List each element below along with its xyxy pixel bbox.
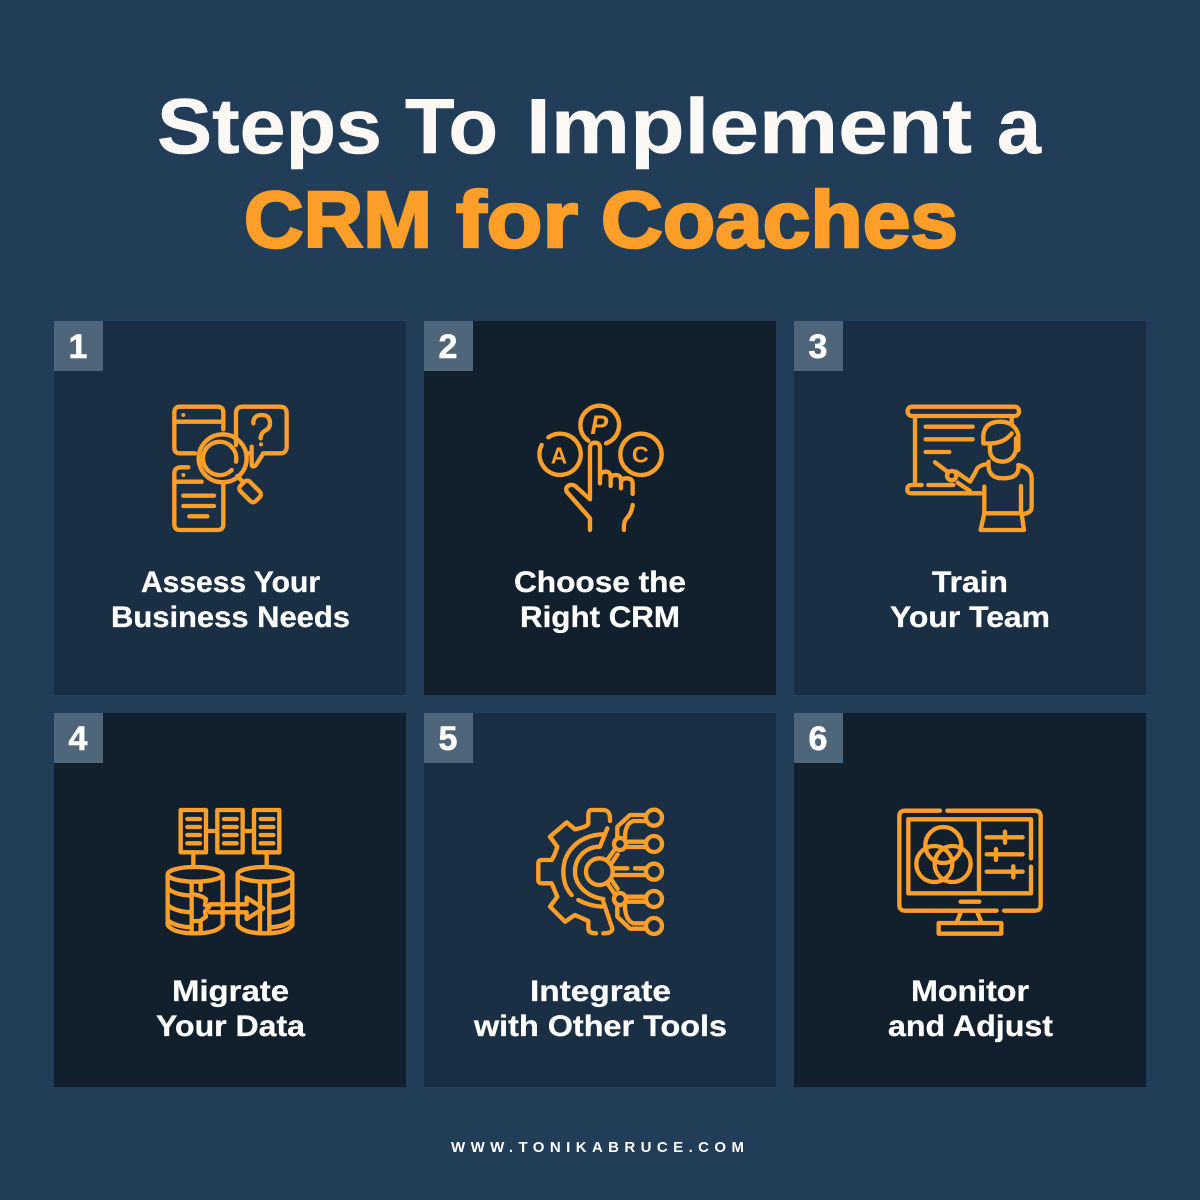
label: Your Data [156,1010,305,1043]
label: Your Team [890,601,1050,634]
icon: trainer at board [907,407,1032,530]
badge: 4: 4 [69,720,88,758]
label: Monitor [911,975,1029,1008]
icon: gear and circuit [538,810,662,934]
title [157,82,1042,264]
panel: step 3 [794,321,1146,695]
icon: hand choosing option [539,406,662,530]
label [111,566,350,634]
title: Coaches [601,175,958,264]
badge: 1 [54,321,103,371]
label: Train [932,566,1008,599]
badge: 2 [424,321,473,371]
icon: monitor with sliders [899,811,1041,934]
icon: hand choosing option: A [551,442,567,468]
icon: data migration [168,810,292,933]
badge: 5 [424,713,473,763]
panel: step 2 [424,321,776,695]
label: Business Needs [111,601,350,634]
title: for [456,175,578,264]
label: and Adjust [888,1010,1053,1043]
label: with Other Tools [473,1010,727,1043]
label [514,566,686,634]
label [156,975,305,1043]
label: Right CRM [520,601,680,634]
badge: 6: 6 [809,720,827,758]
panel: step 1 [54,321,406,695]
label [473,975,727,1043]
icon: hand choosing option: C [632,442,649,468]
badge: 2: 2 [439,328,457,366]
label: Migrate [172,975,289,1008]
title: CRM [244,175,432,264]
icon: hand choosing option: P [590,410,608,440]
title: a [997,82,1042,170]
title: Steps [157,82,382,170]
panel: step 6 [794,713,1146,1087]
panel: step 4 [54,713,406,1087]
label: Assess Your [141,566,320,599]
badge: 4 [54,713,103,763]
title: Implement [526,82,972,170]
label: Integrate [530,975,671,1008]
label [888,975,1053,1043]
badge: 1: 1 [69,328,87,366]
badge: 5: 5 [439,720,457,758]
footer url: WWW.TONIKABRUCE.COM [451,1139,744,1156]
badge: 6 [794,713,843,763]
label [890,566,1050,634]
title: To [405,82,498,170]
badge: 3: 3 [809,328,827,366]
label: Choose the [514,566,686,599]
icon: magnifier over documents [174,407,287,530]
panel: step 5 [424,713,776,1087]
badge: 3 [794,321,843,371]
